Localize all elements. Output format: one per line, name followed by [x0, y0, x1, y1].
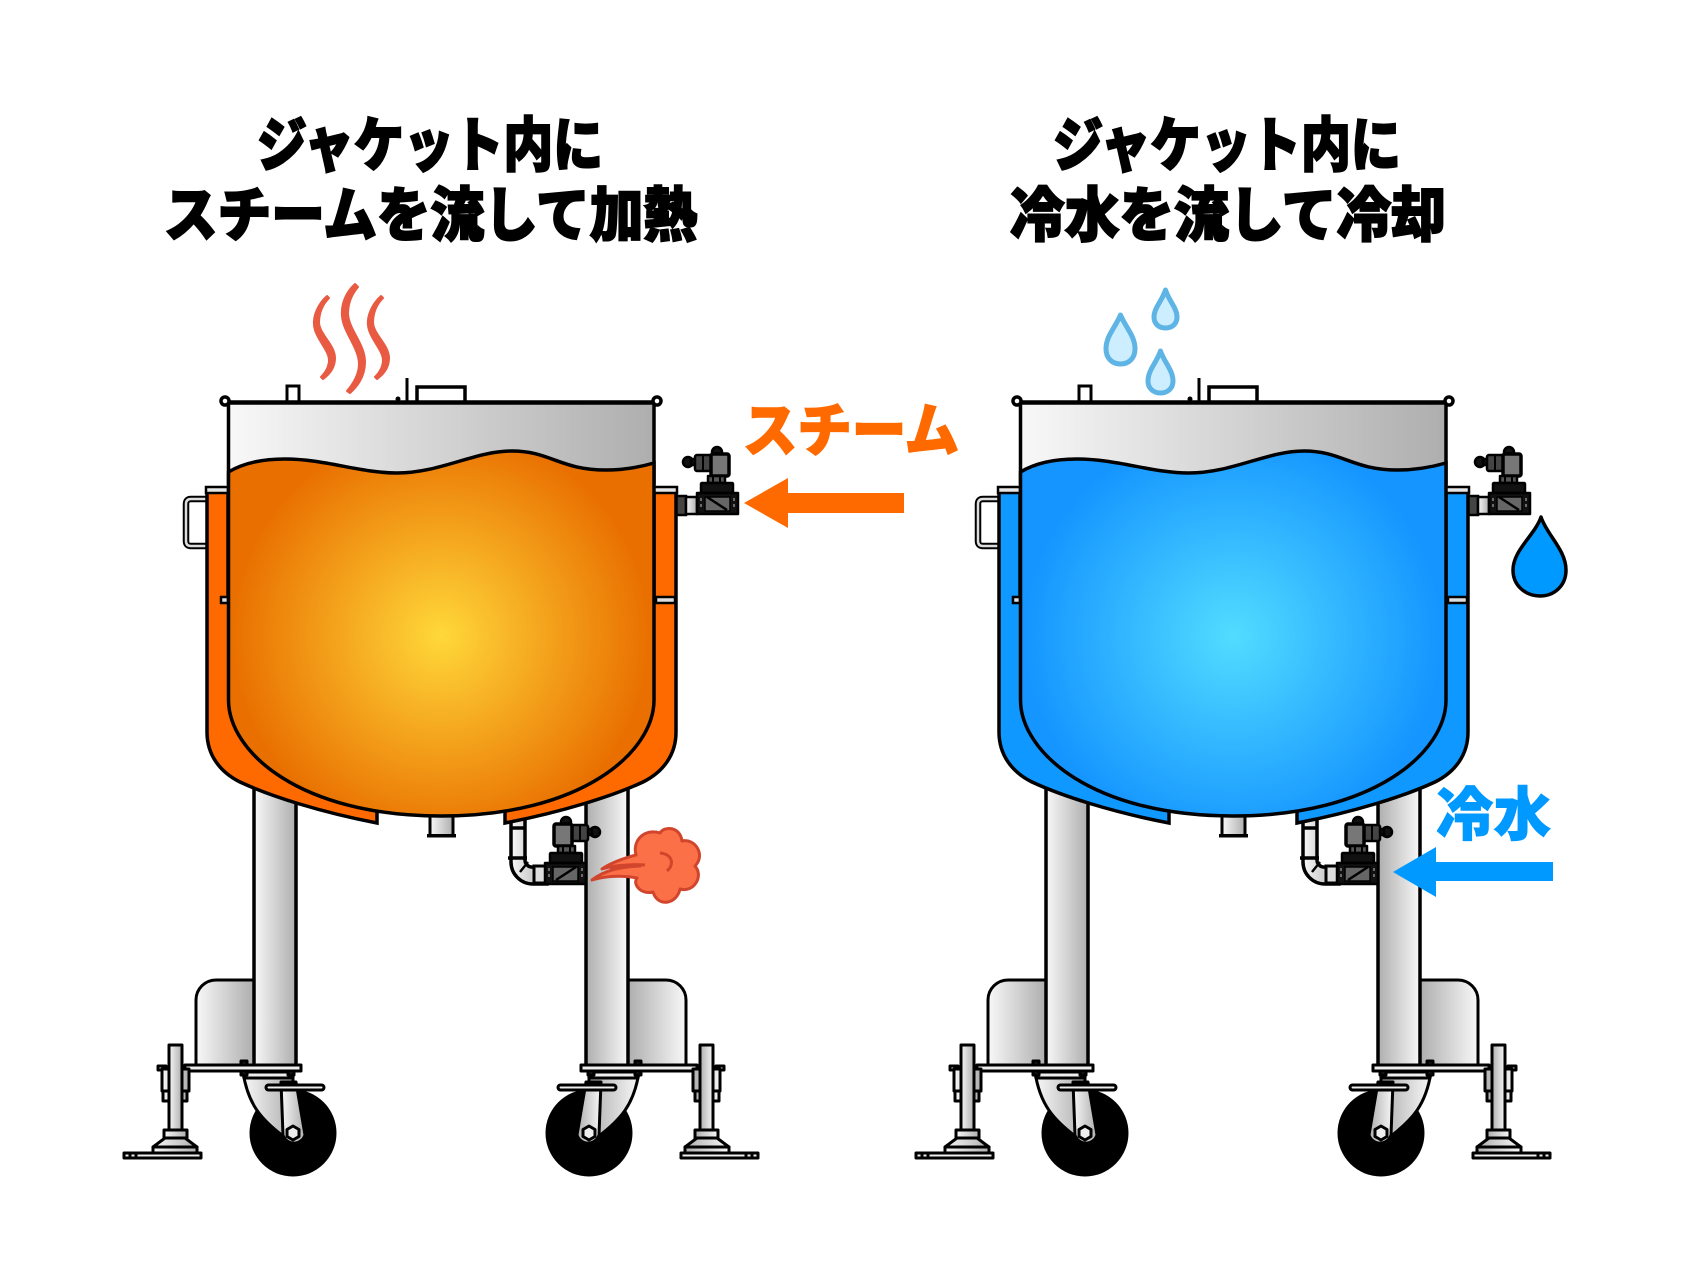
label: cold water: 冷水 — [1436, 783, 1551, 848]
icon: big water drop — [1513, 517, 1566, 596]
label: steam: スチーム — [743, 399, 959, 464]
icon: water droplets — [1106, 290, 1177, 393]
title: heating: スチームを流して加熱 — [164, 183, 697, 249]
icon: steam wisps — [314, 284, 389, 393]
icon: steam puff — [592, 828, 700, 902]
heating vessel — [124, 378, 758, 1176]
title: cooling — [1010, 113, 1446, 249]
arrow: cold water in — [1393, 847, 1553, 897]
arrow: steam in — [744, 478, 904, 528]
title: heating: ジャケット内に — [257, 113, 603, 179]
cooling vessel — [916, 378, 1550, 1176]
title: cooling: 冷水を流して冷却 — [1010, 183, 1446, 249]
title: cooling: ジャケット内に — [1053, 113, 1401, 179]
title: heating — [164, 113, 697, 249]
